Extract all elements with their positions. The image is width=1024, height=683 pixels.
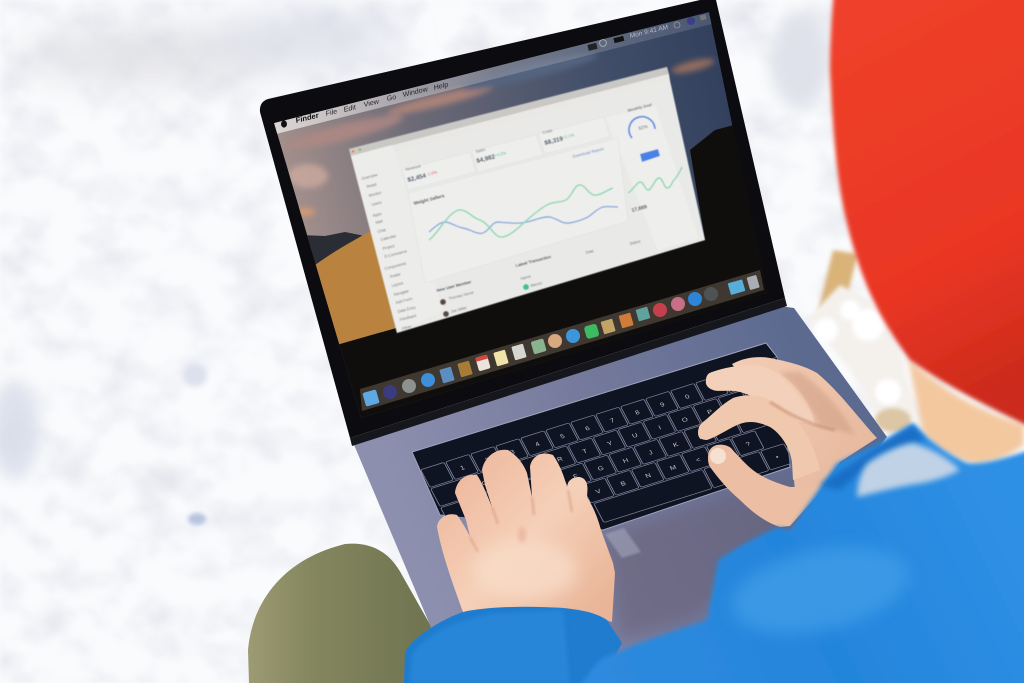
- key legends: W: [505, 471, 516, 479]
- sparkline widget: [628, 167, 682, 214]
- back of hand highlight: [473, 540, 577, 600]
- stat card: sales: +4.2%: [494, 150, 507, 158]
- menu bar: [274, 12, 712, 134]
- sidebar menu: Monitor: [368, 190, 383, 198]
- key legends: 7: [609, 418, 616, 424]
- latest transaction list: [515, 238, 641, 290]
- sparkline widget: 17,889: [631, 204, 648, 214]
- side panel: [606, 105, 698, 250]
- status bar icons and clock: [587, 14, 707, 51]
- key legends: P: [706, 409, 714, 416]
- window controls: [352, 148, 361, 153]
- right hand: [698, 357, 877, 527]
- snow highlights: [814, 300, 901, 405]
- sidebar menu: Apps: [372, 211, 382, 218]
- key legends: D: [547, 481, 555, 488]
- dashboard app window: [349, 67, 705, 333]
- dark blue collar shadow: [820, 425, 925, 490]
- hinge: [350, 298, 787, 446]
- sidebar menu: Data Entry: [397, 304, 416, 314]
- latest transaction list: Latest Transaction: [515, 254, 552, 268]
- peach clouds: [285, 48, 716, 216]
- thumb: [708, 445, 823, 527]
- sidebar menu: Chat: [377, 227, 387, 234]
- wrist shadow: [780, 372, 855, 435]
- stat card: revenue: [405, 164, 438, 182]
- key legends: Z: [520, 512, 527, 519]
- key legends: A: [497, 497, 505, 504]
- key legends: T: [582, 448, 589, 455]
- key legends: F: [572, 473, 580, 480]
- stat card: sales: Sales: [475, 147, 486, 154]
- sidebar menu: Mail: [375, 218, 383, 225]
- apple logo: [281, 120, 287, 128]
- stat card: revenue: $2,454: [407, 172, 427, 184]
- lid bezel: [260, 0, 785, 438]
- upper finger: [706, 365, 815, 425]
- neck: [908, 358, 1024, 463]
- sidebar: [378, 146, 398, 333]
- stat card: sales: [475, 148, 506, 164]
- key legends: C: [569, 496, 578, 503]
- key legends: ?: [745, 441, 752, 448]
- key legends: Y: [606, 440, 614, 447]
- menu items: View: [363, 97, 380, 109]
- green series: [429, 185, 613, 240]
- latest transaction list: Bitcoin: [530, 280, 543, 288]
- key legends: S: [522, 489, 530, 496]
- dark desert foreground: [333, 122, 775, 425]
- keyboard well: [412, 343, 790, 530]
- knuckle redness: [518, 527, 526, 543]
- latest transaction list: Name: [520, 274, 531, 281]
- shadow between fingers: [770, 402, 835, 430]
- menu items: File: [325, 107, 338, 118]
- olive trousers leg: [248, 544, 432, 683]
- jacket sleeve cuff: [404, 607, 622, 683]
- key legends: B: [620, 480, 628, 488]
- red knit hat: [830, 0, 1024, 432]
- trackpad shading: [603, 475, 810, 640]
- sidebar menu: Users: [371, 200, 382, 207]
- menu items: Finder: [295, 111, 319, 125]
- key legends: N: [644, 473, 653, 480]
- keys: [420, 357, 790, 522]
- new user member list: New User Member: [436, 279, 472, 293]
- legend: Download Report: [572, 146, 605, 159]
- gauge button: [640, 149, 660, 162]
- key legends: 1: [459, 465, 466, 472]
- key legends: [460, 394, 778, 494]
- key legends: G: [597, 465, 605, 473]
- basket frame: [818, 250, 858, 312]
- toolbar: [668, 74, 670, 80]
- keyboard: [412, 342, 790, 530]
- sidebar menu: [361, 172, 417, 331]
- key legends: <: [695, 457, 702, 464]
- new user member list: Joe Miller: [450, 305, 468, 314]
- gauge widget: 82%: [638, 124, 648, 131]
- laptop lid: [260, 0, 787, 446]
- key legends: U: [631, 432, 639, 440]
- screen: [274, 12, 775, 425]
- distant mountains: [307, 232, 362, 268]
- key legends: R: [556, 456, 564, 463]
- line chart card: [413, 148, 618, 241]
- left hand: [437, 450, 615, 622]
- gauge widget: [627, 102, 660, 162]
- stat card: costs: $8,319: [544, 135, 564, 147]
- dock: [360, 270, 764, 411]
- sidebar menu: Avatar: [389, 271, 402, 279]
- stat card: costs: [542, 129, 574, 146]
- stat card: costs: Costs: [542, 128, 553, 135]
- latest transaction list: Status: [629, 238, 641, 246]
- new user member list: Thomas Horne: [448, 290, 474, 301]
- jacket body: [575, 423, 1024, 683]
- sidebar menu: Other: [401, 323, 412, 331]
- blue series: [429, 207, 618, 233]
- wallpaper sky: [274, 12, 767, 418]
- dock icons: [362, 275, 760, 407]
- key legends: 6: [584, 425, 591, 432]
- snow clumps and wooden basket: [808, 250, 915, 436]
- sidebar menu: Feedback: [399, 313, 417, 322]
- laptop lower deck: [352, 306, 887, 683]
- key legends: H: [622, 457, 630, 465]
- window body: [349, 67, 705, 333]
- sidebar menu: Calendar: [380, 233, 397, 242]
- key legends: M: [669, 464, 678, 472]
- thumbnail: [707, 445, 729, 467]
- sidebar menu: Overview: [361, 172, 378, 181]
- sidebar menu: Navigate: [393, 288, 409, 297]
- sidebar menu: Project: [382, 243, 396, 251]
- key legends: E: [531, 464, 539, 471]
- jacket light fold: [724, 532, 916, 648]
- key legends: Q: [481, 480, 489, 487]
- menu items: Edit: [343, 103, 356, 114]
- key legends: J: [648, 450, 654, 457]
- back of hand and wrist: [732, 357, 877, 495]
- key legends: ⌘: [719, 470, 729, 478]
- stat card: revenue: Revenue: [405, 163, 421, 172]
- key legends: 5: [559, 433, 566, 440]
- tan base: [875, 408, 911, 432]
- key legends: 8: [634, 410, 641, 417]
- blue jacket: [404, 423, 1024, 683]
- key legends: V: [595, 488, 603, 495]
- key legends: •: [775, 454, 781, 461]
- key legends: I: [658, 425, 663, 431]
- sidebar menu: E-Commerce: [384, 248, 408, 259]
- key legends: {: [732, 401, 738, 408]
- menu items: Go: [386, 93, 397, 103]
- sleeve highlight: [410, 610, 570, 683]
- stat card: sales: $4,982: [476, 153, 496, 165]
- menu items: Help: [433, 81, 449, 92]
- latest transaction list: Date: [585, 248, 594, 255]
- key legends: 0: [684, 394, 691, 401]
- new user member list: [436, 279, 474, 317]
- key legends: 2: [484, 457, 491, 464]
- key legends: L: [698, 434, 705, 441]
- key legends: 9: [659, 402, 666, 409]
- title bar: [349, 67, 669, 156]
- reflection on trackpad: [605, 528, 641, 558]
- key legends: K: [672, 442, 680, 449]
- sidebar menu: Add Form: [395, 296, 413, 305]
- gauge widget: Monthly Goal: [627, 102, 652, 113]
- snow pile: [808, 285, 915, 436]
- chart title: Weight Sellers: [413, 193, 445, 206]
- key legends: 4: [534, 441, 541, 448]
- dock bar: [360, 270, 764, 411]
- stat card: revenue: -1.6%: [426, 169, 438, 177]
- hood lining: [857, 443, 960, 497]
- status bar icons and clock: Mon 9:41 AM: [630, 24, 668, 40]
- menu items: Window: [402, 85, 429, 99]
- middle finger: [698, 395, 820, 480]
- key legends: X: [545, 504, 553, 511]
- key legends: 3: [509, 449, 516, 456]
- sidebar menu: Components: [384, 261, 407, 271]
- stat card: costs: +2.1%: [562, 132, 575, 140]
- menu items: [295, 81, 449, 125]
- finger shading: [470, 490, 572, 552]
- sidebar menu: Retail: [366, 182, 377, 189]
- dune: [311, 230, 397, 346]
- key legends: O: [681, 417, 689, 424]
- sidebar menu: Layout: [391, 280, 404, 288]
